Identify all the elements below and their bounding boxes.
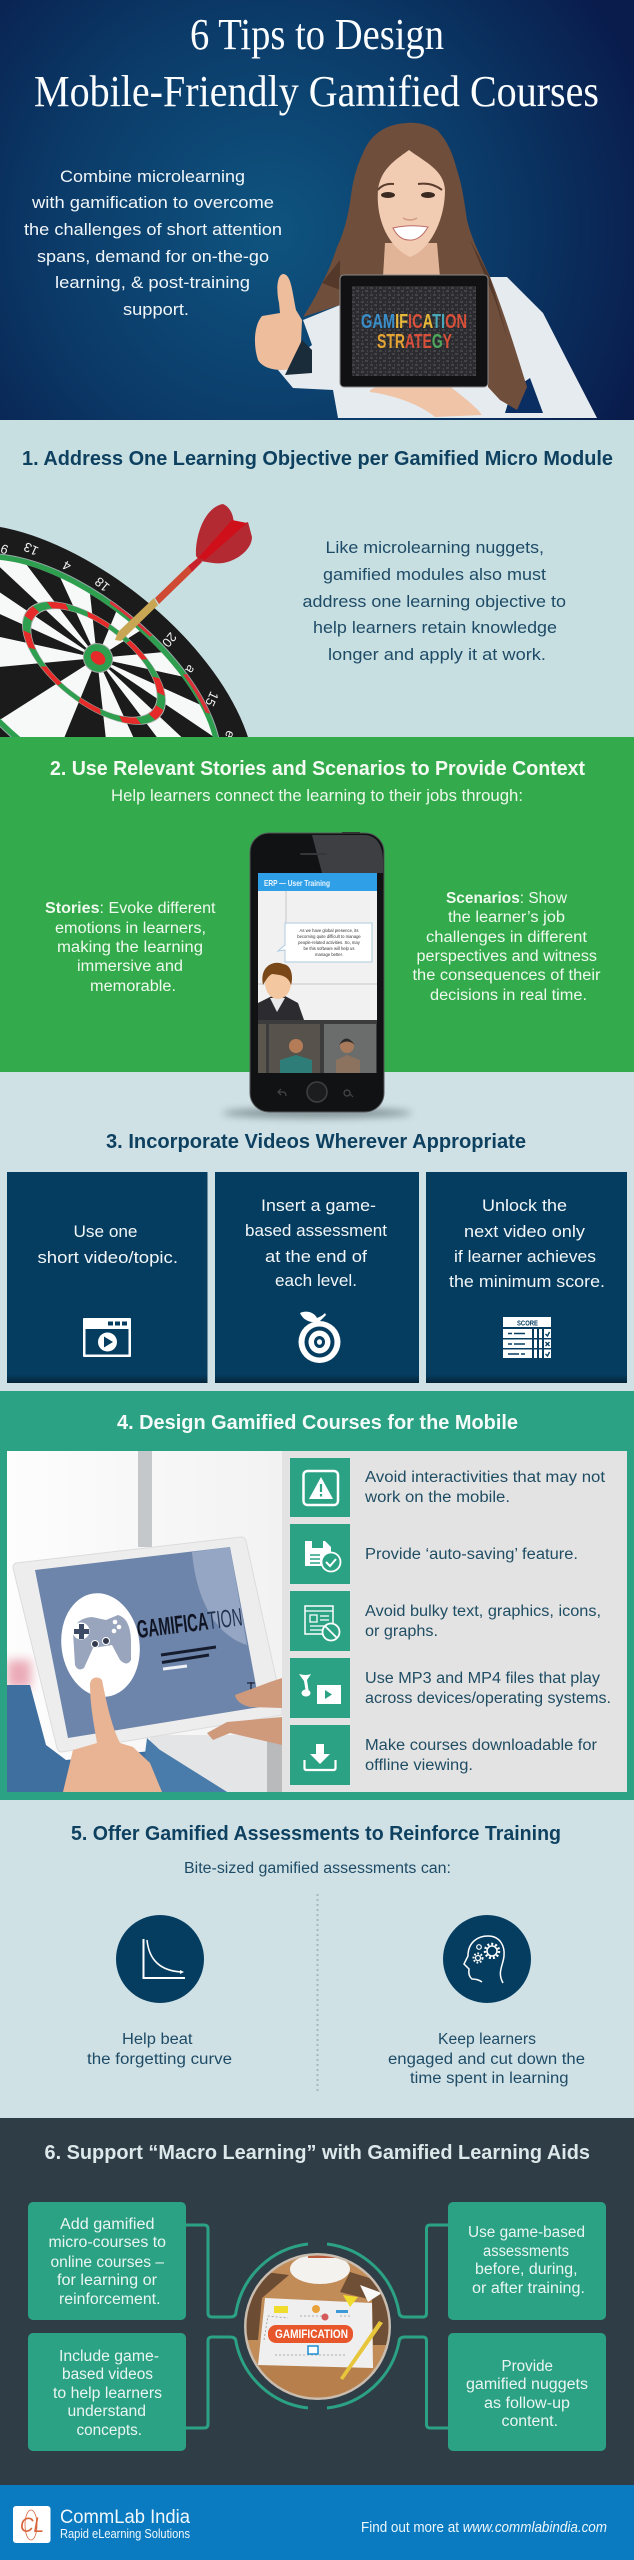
title: 6 Tips to Design <box>190 10 444 59</box>
board wedges <box>0 565 213 737</box>
panel: hero <box>0 0 634 420</box>
dartboard <box>0 527 248 737</box>
box: gamified nuggets: as follow-up <box>484 2395 570 2412</box>
icon: video window <box>83 1318 131 1357</box>
intro text <box>24 167 282 319</box>
item: mp3 and mp4: across devices/operating systems. <box>365 1690 611 1707</box>
subheading 2: Help learners connect the learning to their jobs through: <box>111 786 523 805</box>
card: game-based assessment <box>215 1172 419 1383</box>
box: gamified nuggets: Provide <box>502 2358 553 2375</box>
logo <box>13 2506 50 2543</box>
box: game-based assessments <box>448 2202 606 2320</box>
gamepad <box>72 1615 131 1669</box>
text: stories: Stories: Evoke different <box>45 900 216 917</box>
hand: thumbs up <box>255 274 312 375</box>
icon: score sheet: SCORE <box>517 1320 538 1328</box>
panel: tip 4 <box>0 1391 634 1800</box>
icon: warning <box>304 1471 338 1505</box>
woman holding tablet <box>255 123 597 418</box>
panel: tip 5 <box>0 1800 634 2118</box>
speech bubble: manage better. <box>315 952 343 957</box>
benefit: engagement: engaged and cut down the <box>388 2051 585 2068</box>
item: mp3 and mp4 <box>290 1658 611 1718</box>
box: game-based videos: concepts. <box>76 2422 142 2439</box>
board numbers: 4 <box>60 558 74 574</box>
text: stories: emotions in learners, <box>55 920 206 937</box>
bullseye <box>82 643 114 673</box>
coat <box>278 277 597 418</box>
card: unlock next video: if learner achieves <box>454 1247 596 1266</box>
list panel <box>282 1451 627 1792</box>
neck <box>383 243 440 285</box>
item: downloadable: offline viewing. <box>365 1757 473 1774</box>
face <box>378 150 445 257</box>
item: bulky content: Avoid bulky text, graphics, icons, <box>365 1603 601 1620</box>
text: scenarios: the consequences of their <box>412 967 600 984</box>
item: bulky content <box>290 1591 601 1651</box>
icon: score sheet <box>503 1317 551 1358</box>
box: micro-courses: micro-courses to <box>48 2234 166 2251</box>
text: tip 1 <box>302 538 566 664</box>
box: micro-courses: for learning or <box>57 2272 157 2289</box>
intro text: with gamification to overcome <box>31 193 274 212</box>
text: tip 1: address one learning objective to <box>302 592 566 611</box>
box: game-based videos: based videos <box>62 2366 153 2383</box>
text: scenarios: challenges in different <box>426 929 588 946</box>
item: auto-saving <box>290 1524 578 1584</box>
text: tip 1: gamified modules also must <box>323 565 546 584</box>
intro text: Combine microlearning <box>60 167 245 186</box>
item: auto-saving: Provide ‘auto-saving’ feature. <box>365 1546 578 1563</box>
text: tip 1: help learners retain knowledge <box>313 618 557 637</box>
tablet: gamification strategy <box>340 275 488 387</box>
dart <box>115 504 252 641</box>
benefit: engagement <box>388 1915 585 2087</box>
box: gamified nuggets: content. <box>502 2413 558 2430</box>
panel: tip 2 <box>0 737 634 1072</box>
box: game-based assessments: assessments <box>483 2243 569 2260</box>
heading 5: 5. Offer Gamified Assessments to Reinforce Training <box>71 1823 561 1845</box>
box: micro-courses: Add gamified <box>60 2216 154 2233</box>
hand: holding tablet <box>370 376 482 417</box>
image: tablet with gamification <box>7 1451 282 1792</box>
panel: tip 3 <box>0 1072 634 1391</box>
footer <box>0 2485 634 2560</box>
item: mp3 and mp4: Use MP3 and MP4 files that play <box>365 1670 600 1687</box>
text: stories: memorable. <box>90 978 176 995</box>
heading 6: 6. Support “Macro Learning” with Gamified Learning Aids <box>44 2142 590 2164</box>
icon: forgetting curve <box>116 1915 204 2003</box>
board numbers: 13 <box>21 539 41 559</box>
benefit: forgetting curve: the forgetting curve <box>87 2051 232 2068</box>
benefit: forgetting curve <box>87 1915 232 2068</box>
phone screen: ERP — User Training <box>264 878 330 888</box>
gamification label <box>268 2325 353 2343</box>
card: game-based assessment: Insert a game- <box>261 1196 376 1215</box>
phone screen <box>258 873 377 1073</box>
text: scenarios: perspectives and witness <box>416 948 597 965</box>
heading 2: 2. Use Relevant Stories and Scenarios to Provide Context <box>50 758 585 780</box>
gamification label: GAMIFICATION <box>275 2327 348 2341</box>
card: one video <box>7 1172 208 1383</box>
item: avoid interactivities: Avoid interactivities that may not <box>365 1469 606 1486</box>
board numbers: 15 <box>202 689 222 709</box>
box: game-based assessments: before, during, <box>475 2261 578 2278</box>
icon: save <box>305 1541 340 1572</box>
tablet: gamification strategy: STRATEGY <box>377 331 452 353</box>
card: unlock next video: next video only <box>464 1222 586 1241</box>
item: downloadable: Make courses downloadable for <box>365 1737 597 1754</box>
logo: CL <box>20 2514 44 2537</box>
heading 1: 1. Address One Learning Objective per Gamified Micro Module <box>22 448 613 470</box>
hand: fingers <box>207 1678 282 1745</box>
icon: apple target <box>298 1312 340 1363</box>
card: unlock next video: Unlock the <box>482 1196 567 1215</box>
box: game-based videos: to help learners <box>53 2385 162 2402</box>
intro text: spans, demand for on-the-go <box>37 247 269 266</box>
board numbers: 20 <box>159 630 180 650</box>
panel: tip 1 <box>0 420 634 737</box>
text: scenarios: Scenarios: Show <box>446 890 568 907</box>
intro text: learning, & post-training <box>55 273 250 292</box>
hand: pointing <box>63 1677 162 1792</box>
box: gamified nuggets: gamified nuggets <box>466 2376 588 2393</box>
benefit: forgetting curve: Help beat <box>122 2031 193 2048</box>
box: game-based videos: Include game- <box>59 2348 159 2365</box>
text: tip 1: longer and apply it at work. <box>328 645 546 664</box>
text: stories <box>45 900 216 995</box>
box: game-based videos: understand <box>68 2403 146 2420</box>
connectors <box>186 2225 448 2428</box>
benefit: engagement: time spent in learning <box>410 2070 568 2087</box>
speech bubble: As we have global presence, its <box>300 928 358 933</box>
center image: gamification notebook <box>244 2253 392 2400</box>
subheading 5: Bite-sized gamified assessments can: <box>184 1860 451 1877</box>
item: downloadable <box>290 1725 597 1785</box>
card: one video: short video/topic. <box>38 1248 178 1267</box>
item: avoid interactivities <box>290 1458 606 1517</box>
text: stories: making the learning <box>57 939 203 956</box>
speech bubble <box>278 923 372 962</box>
board numbers <box>0 539 239 741</box>
board numbers: e <box>222 729 239 741</box>
box: game-based assessments: Use game-based <box>468 2224 585 2241</box>
text: stories: immersive and <box>77 958 183 975</box>
icon: download <box>304 1744 336 1770</box>
box: gamified nuggets <box>448 2333 606 2451</box>
speech bubble: people-related activities. So, may <box>298 940 361 945</box>
box: game-based videos <box>28 2333 186 2451</box>
company name: Rapid eLearning Solutions <box>60 2526 190 2541</box>
heading 4: 4. Design Gamified Courses for the Mobile <box>117 1412 518 1434</box>
intro text: the challenges of short attention <box>24 220 282 239</box>
heading 3: 3. Incorporate Videos Wherever Appropriate <box>106 1131 526 1153</box>
panel: tip 6 <box>0 2118 634 2485</box>
text: scenarios: decisions in real time. <box>430 987 587 1004</box>
card: one video: Use one <box>74 1222 138 1241</box>
company name: CommLab India <box>60 2507 190 2528</box>
benefit: engagement: Keep learners <box>438 2031 536 2048</box>
icon: head with gears <box>443 1915 531 2003</box>
item: bulky content: or graphs. <box>365 1623 438 1640</box>
board numbers: 18 <box>92 574 112 595</box>
card: game-based assessment: based assessment <box>245 1221 387 1240</box>
board numbers: a <box>182 662 199 677</box>
intro text: support. <box>123 300 189 319</box>
hair <box>303 123 527 410</box>
thumbnails strip <box>258 1020 377 1073</box>
speech bubble: becoming quite difficult to manage <box>297 934 361 939</box>
tablet: gamification strategy: GAMIFICATION <box>361 311 467 333</box>
text: scenarios <box>412 890 600 1004</box>
box: micro-courses: reinforcement. <box>59 2291 160 2308</box>
icon: music and film <box>299 1674 341 1704</box>
card: game-based assessment: each level. <box>275 1271 357 1290</box>
image: tablet with gamification: GAMIFICATION <box>135 1603 244 1644</box>
text: tip 1: Like microlearning nuggets, <box>326 538 544 557</box>
title <box>34 10 599 116</box>
phone illustration <box>222 832 412 1118</box>
website link text: Find out more at www.commlabindia.com <box>361 2519 607 2536</box>
triple ring <box>22 601 166 725</box>
card: unlock next video: the minimum score. <box>449 1272 605 1291</box>
item: avoid interactivities: work on the mobile. <box>364 1489 510 1506</box>
character <box>258 963 304 1020</box>
speech bubble: be this software will help us <box>304 946 354 951</box>
text: scenarios: the learner’s job <box>448 909 565 926</box>
card: game-based assessment: at the end of <box>265 1247 367 1266</box>
box: micro-courses <box>28 2202 186 2320</box>
box: micro-courses: online courses – <box>50 2254 164 2271</box>
box: game-based assessments: or after training. <box>472 2280 585 2297</box>
card: unlock next video <box>426 1172 627 1383</box>
icon: no graphics <box>305 1606 340 1640</box>
company name <box>60 2507 190 2541</box>
